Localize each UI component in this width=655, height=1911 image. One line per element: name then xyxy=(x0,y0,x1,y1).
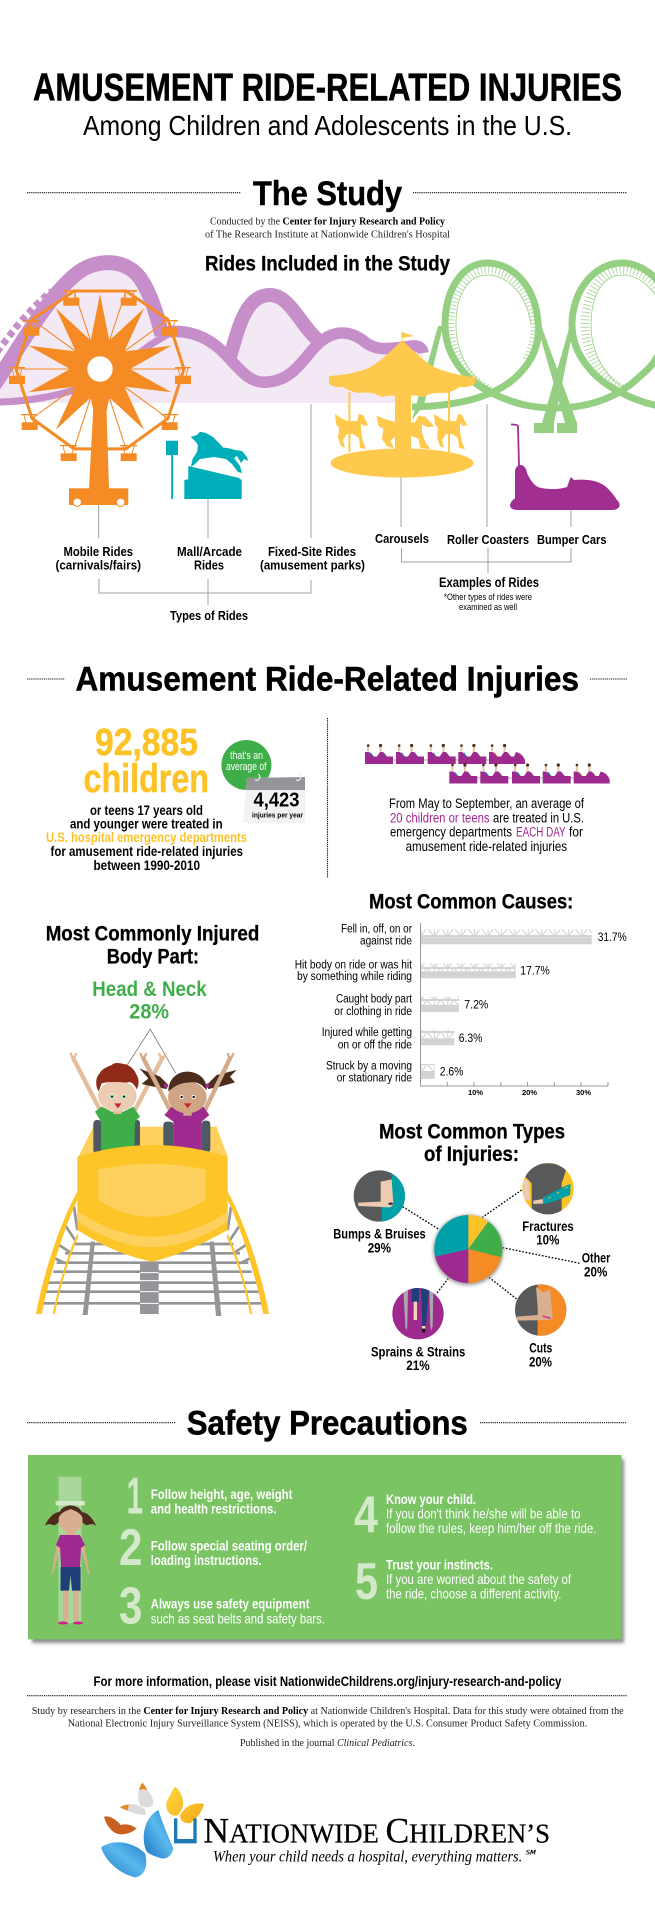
step 3: such as seat belts and safety bars. xyxy=(151,1610,325,1626)
bar: struck: 2.6% xyxy=(440,1067,463,1079)
bar: hit body: Hit body on ride or was hit xyxy=(295,959,413,971)
icon: ferris wheel xyxy=(9,290,191,506)
axes: 20% xyxy=(522,1088,537,1097)
heading: most common types of injuries xyxy=(379,1119,565,1166)
icon: trains with 20 riders xyxy=(365,744,610,784)
stat: 92,885 children: children xyxy=(84,757,209,801)
label: bumps and bruises 29% xyxy=(333,1225,426,1255)
bar: fell: against ride xyxy=(360,935,412,947)
study source note: Study by researchers in the Center for Injury Research and Policy at Nationwide Children's Hospital. Data for this study were obtained from the xyxy=(32,1706,624,1717)
stat: 92,885 children xyxy=(46,722,247,873)
labels: types of rides: Types of Rides xyxy=(170,608,248,623)
logo: butterflies xyxy=(101,1783,204,1877)
step 5: the ride, choose a different activity. xyxy=(386,1586,561,1602)
panel: safety precautions xyxy=(28,1455,624,1643)
girl xyxy=(139,1054,237,1153)
injury icons xyxy=(353,1160,577,1340)
bar: caught: 7.2% xyxy=(464,1000,488,1012)
icon: sprains and strains xyxy=(392,1287,445,1340)
label: cuts 20%: Cuts xyxy=(529,1340,552,1356)
labels: types of rides xyxy=(56,545,365,623)
label: sprains and strains 21%: 21% xyxy=(406,1357,430,1373)
illustration: green roller coaster xyxy=(412,263,655,433)
step 2: Follow special seating order/ xyxy=(151,1538,307,1554)
bar: hit body: 17.7% xyxy=(520,965,550,977)
heading: most commonly injured body part: Body Part: xyxy=(107,944,199,968)
axes xyxy=(420,923,608,1097)
step 5: If you are worried about the safety of xyxy=(386,1571,571,1587)
illustration: purple roller coaster background xyxy=(0,263,423,403)
bar: fell xyxy=(341,923,627,947)
labels: examples of rides xyxy=(375,531,606,613)
bar: getting on or off: on or off the ride xyxy=(338,1039,412,1051)
label: cuts 20% xyxy=(529,1340,552,1370)
pie chart: injury types xyxy=(433,1215,503,1285)
bar: struck xyxy=(326,1060,463,1085)
callout: that's an average of: average of xyxy=(226,761,267,773)
labels: types of rides: (carnivals/fairs) xyxy=(56,558,141,572)
labels: examples of rides: Roller Coasters xyxy=(447,532,529,547)
label: fractures 10%: 10% xyxy=(536,1231,560,1247)
step 4: follow the rules, keep him/her off the ride. xyxy=(386,1520,596,1536)
step 1: 1 xyxy=(127,1467,143,1525)
heading: most common types of injuries: Most Common Types xyxy=(379,1119,565,1143)
heading: most commonly injured body part: Most Commonly Injured xyxy=(46,922,259,946)
label: sprains and strains 21% xyxy=(371,1344,465,1373)
step 2 xyxy=(119,1519,307,1577)
study attribution: of The Research Institute at Nationwide Children's Hospital xyxy=(205,229,450,240)
text: daily injuries: EACH DAY xyxy=(516,825,566,840)
label: fractures 10% xyxy=(522,1218,574,1247)
bar: getting on or off xyxy=(322,1027,482,1051)
stat: 92,885 children: and younger were treated in xyxy=(70,817,223,832)
stat: 92,885 children: or teens 17 years old xyxy=(90,803,203,818)
icon: cuts xyxy=(513,1283,568,1337)
bar: struck: Struck by a moving xyxy=(326,1060,412,1072)
step 1: and health restrictions. xyxy=(151,1500,276,1516)
labels: examples of rides: Carousels xyxy=(375,531,429,546)
icon: carousel xyxy=(329,332,475,478)
labels: types of rides: Mobile Rides xyxy=(64,545,133,559)
label: sprains and strains 21%: Sprains & Strains xyxy=(371,1344,465,1360)
text: daily injuries: emergency departments xyxy=(390,825,512,840)
stat: 92,885 children: for amusement ride-related injuries xyxy=(50,844,243,859)
step 5 xyxy=(355,1553,571,1611)
study attribution: Conducted by the Center for Injury Research and Policy xyxy=(210,216,446,228)
labels: types of rides: Mall/Arcade xyxy=(177,545,242,559)
icon: calendar with 4,423 injuries per year xyxy=(243,774,305,823)
section heading: The Study: The Study xyxy=(253,175,402,213)
step 4: Know your child. xyxy=(386,1491,476,1507)
more information line: For more information, please visit NationwideChildrens.org/injury-research-and-policy xyxy=(94,1673,562,1689)
step 2: loading instructions. xyxy=(151,1552,262,1568)
icon: fractures xyxy=(522,1163,574,1214)
labels: types of rides: Fixed-Site Rides xyxy=(268,545,356,559)
leader lines: rides xyxy=(99,404,571,538)
study source note: National Electronic Injury Surveillance System (NEISS), which is operated by the U.S. Consumer Product Safety Commission. xyxy=(68,1719,587,1730)
logo: Nationwide Children's wordmark: NATIONWIDE CHILDREN’S xyxy=(203,1811,550,1851)
section heading: Amusement Ride-Related Injuries: Amusement Ride-Related Injuries xyxy=(76,661,579,699)
heading: most commonly injured body part xyxy=(46,922,259,968)
logo: Nationwide Children's wordmark: When your child needs a hospital, everything matters.℠ xyxy=(213,1849,537,1866)
study attribution xyxy=(205,216,450,240)
labels: examples of rides: Examples of Rides xyxy=(439,575,539,590)
icon: girl at height chart xyxy=(45,1477,96,1624)
bar chart: causes xyxy=(295,923,627,1097)
step 1 xyxy=(127,1467,293,1525)
text: daily injuries: are treated in U.S. xyxy=(493,811,584,826)
step 3: 3 xyxy=(119,1577,142,1635)
icon: bumps and bruises xyxy=(353,1170,407,1222)
bar: getting on or off: Injured while getting xyxy=(322,1027,412,1039)
text: daily injuries: for xyxy=(569,825,583,840)
labels: types of rides: (amusement parks) xyxy=(260,558,365,572)
label: other 20%: 20% xyxy=(584,1264,608,1280)
stat: head and neck 28% xyxy=(92,977,207,1073)
step 4: If you don't think he/she will be able to xyxy=(386,1505,581,1521)
leader lines: injury types xyxy=(403,1190,580,1299)
text: daily injuries xyxy=(389,796,584,854)
stat: 92,885 children: U.S. hospital emergency departments xyxy=(46,830,247,845)
callout: that's an average of xyxy=(221,740,271,790)
step 4 xyxy=(354,1486,596,1544)
boy xyxy=(71,1053,165,1153)
step 2: 2 xyxy=(119,1519,142,1577)
step 3 xyxy=(119,1577,325,1635)
labels: examples of rides: *Other types of rides were xyxy=(444,592,532,603)
stat: 92,885 children: between 1990-2010 xyxy=(94,858,200,873)
vertical dotted divider xyxy=(326,718,328,878)
icon: arcade horse ride xyxy=(166,432,248,499)
stat: head and neck 28%: Head & Neck xyxy=(92,977,207,1001)
labels: examples of rides: examined as well xyxy=(459,602,517,613)
bar: caught: or clothing in ride xyxy=(334,1006,412,1018)
bar: struck: or stationary ride xyxy=(337,1073,412,1085)
heading: most common types of injuries: of Injuries: xyxy=(424,1142,519,1166)
callout: that's an average of: that's an xyxy=(230,750,263,762)
axes: 10% xyxy=(468,1088,483,1097)
text: daily injuries: 20 children or teens xyxy=(390,811,490,826)
bar: hit body: by something while riding xyxy=(297,971,412,983)
icon: calendar with 4,423 injuries per year: injuries per year xyxy=(252,811,303,820)
label: cuts 20%: 20% xyxy=(529,1354,552,1370)
study source note: Published in the journal Clinical Pediatrics. xyxy=(240,1738,415,1749)
bar: hit body xyxy=(295,959,550,983)
step 4: 4 xyxy=(354,1486,378,1544)
track xyxy=(36,1192,269,1316)
heading: most common causes: Most Common Causes: xyxy=(369,889,573,913)
step 1: Follow height, age, weight xyxy=(151,1486,293,1502)
bar: fell: Fell in, off, on or xyxy=(341,923,412,935)
heading: rides included: Rides Included in the Study xyxy=(205,252,450,276)
axes: 30% xyxy=(576,1088,591,1097)
section heading: Safety Precautions: Safety Precautions xyxy=(187,1404,468,1442)
bar: caught xyxy=(334,994,488,1018)
stat: 92,885 children: 92,885 xyxy=(95,722,198,764)
text: daily injuries: amusement ride-related injuries xyxy=(406,839,567,854)
step 5: 5 xyxy=(355,1553,378,1611)
label: bumps and bruises 29%: Bumps & Bruises xyxy=(333,1225,426,1241)
label: bumps and bruises 29%: 29% xyxy=(368,1239,391,1255)
subtitle: Among Children and Adolescents in the U.S. xyxy=(83,110,572,141)
bar: caught: Caught body part xyxy=(336,994,413,1006)
step 5: Trust your instincts. xyxy=(386,1556,493,1572)
label: other 20%: Other xyxy=(582,1250,611,1266)
labels: examples of rides: Bumper Cars xyxy=(537,532,606,547)
step 3: Always use safety equipment xyxy=(151,1596,310,1612)
car front xyxy=(77,1145,228,1262)
icon: bumper car xyxy=(510,424,620,510)
stat: head and neck 28%: 28% xyxy=(129,1000,169,1024)
study source note xyxy=(32,1706,624,1749)
bar: fell: 31.7% xyxy=(598,932,627,944)
illustration: kids on roller coaster xyxy=(36,1053,269,1316)
icon: calendar with 4,423 injuries per year: 4,423 xyxy=(254,790,300,812)
labels: types of rides: Rides xyxy=(194,558,224,572)
label: other 20% xyxy=(582,1250,611,1280)
text: daily injuries: From May to September, an average of xyxy=(389,796,584,811)
bar: getting on or off: 6.3% xyxy=(459,1033,482,1045)
label: fractures 10%: Fractures xyxy=(522,1218,574,1234)
